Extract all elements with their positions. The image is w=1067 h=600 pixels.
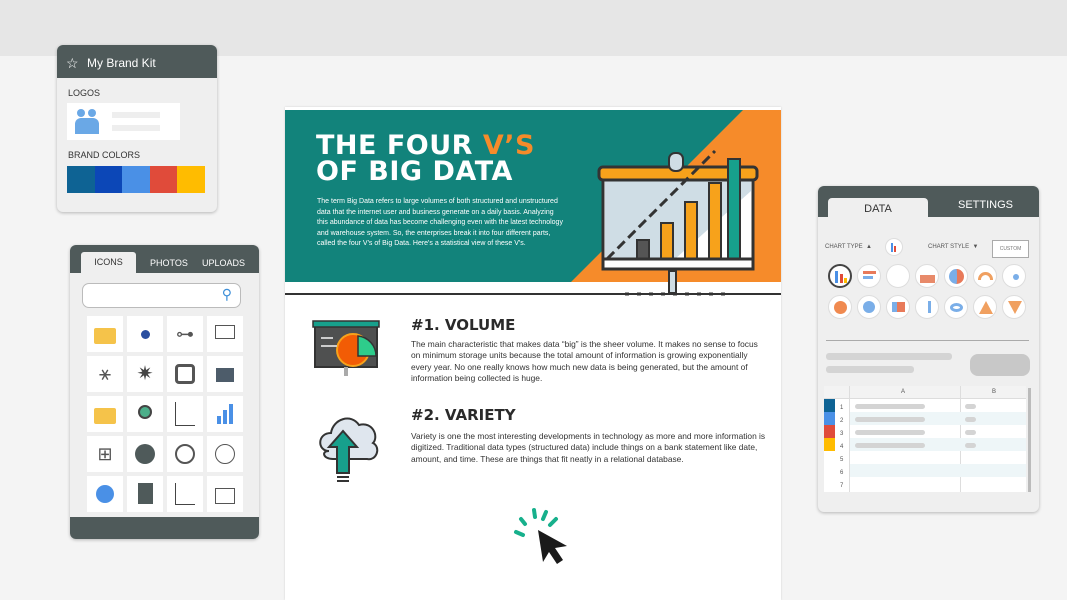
icon grid: ⊞ <box>97 444 113 464</box>
panel footer <box>70 517 259 539</box>
orange triangle <box>571 110 781 282</box>
icon: cloud upload <box>319 418 378 482</box>
icon: presentation bar chart <box>598 150 758 296</box>
tabs: ICONS <box>94 257 123 267</box>
logos label: LOGOS <box>68 88 100 98</box>
title <box>316 130 535 187</box>
data table <box>824 386 1026 492</box>
text: variety: Variety is one the most interesting developments in technology as more and more information is digitized. Traditional data types (structured data) include things on a bank statement like date, amount, and time. These are things that fit neatly in a relational database. <box>411 431 765 464</box>
data table: B <box>992 389 996 395</box>
data table: 4 <box>840 444 843 450</box>
icon grid <box>87 316 243 512</box>
title: OF BIG DATA <box>316 156 513 187</box>
heading: volume: #1. VOLUME <box>411 316 515 334</box>
chart type row: CHART TYPE ▲ <box>825 244 872 250</box>
tabs <box>70 245 259 273</box>
brand kit header: My Brand Kit <box>87 56 156 70</box>
intro text: The term Big Data refers to large volumes of both structured and unstructured data that the internet user and business generate on a daily basis. Analyzing this abundance of data has become challenging even with the latest technology and warehouse system. So, the enterprises break it into four different parts, called the four V's of Big Data. Here's a statistical view of these V's. <box>317 198 563 247</box>
section: volume <box>312 316 758 383</box>
tabs: UPLOADS <box>202 258 245 268</box>
search box <box>82 283 241 308</box>
panel: icons library <box>70 245 259 539</box>
tabs: DATA <box>864 203 892 215</box>
panel: infographic page <box>285 107 781 600</box>
text: volume: The main characteristic that makes data “big” is the sheer volume. It makes no sense to focus on minimum storage units because the total amount of information is growing exponentially every year. No one really knows how much new data is being generated, but the amount of information being collected is huge. <box>411 339 758 383</box>
data table: 2 <box>840 418 843 424</box>
scrollbar <box>1028 388 1031 492</box>
custom button <box>992 240 1029 258</box>
placeholder bars <box>826 353 952 360</box>
data table: A <box>901 389 905 395</box>
icon: presentation pie <box>312 320 380 376</box>
color swatches <box>67 166 205 193</box>
tabs <box>818 186 1039 217</box>
brand kit header: ☆ <box>66 55 79 71</box>
icon grid: ✷ <box>137 363 153 385</box>
tabs: PHOTOS <box>150 258 188 268</box>
top band <box>0 0 1067 56</box>
data table: 1 <box>840 405 843 411</box>
heading: variety: #2. VARIETY <box>411 406 516 424</box>
data table: 7 <box>840 483 843 489</box>
panel: chart data settings <box>818 186 1039 512</box>
chart type icons <box>828 264 1026 319</box>
custom button: CUSTOM <box>1000 246 1021 252</box>
separator <box>826 340 1029 341</box>
brand colors label: BRAND COLORS <box>68 150 140 160</box>
tabs: SETTINGS <box>958 199 1013 211</box>
section: variety <box>319 406 765 482</box>
data table: 3 <box>840 431 843 437</box>
divider <box>285 293 781 295</box>
title: THE FOUR V’S <box>316 130 535 161</box>
search box: ⚲ <box>222 286 232 302</box>
brand kit header <box>57 45 217 78</box>
data table: 6 <box>840 470 843 476</box>
icon: click cursor <box>514 508 567 564</box>
panel: chart data settings: CHART STYLE ▼ <box>928 244 978 250</box>
icon grid: ⊶ <box>176 324 194 344</box>
panel: my brand kit <box>57 45 217 212</box>
header banner <box>285 110 781 282</box>
icon grid: ⚹ <box>99 363 111 385</box>
logo box <box>67 103 180 140</box>
data table: 5 <box>840 457 843 463</box>
